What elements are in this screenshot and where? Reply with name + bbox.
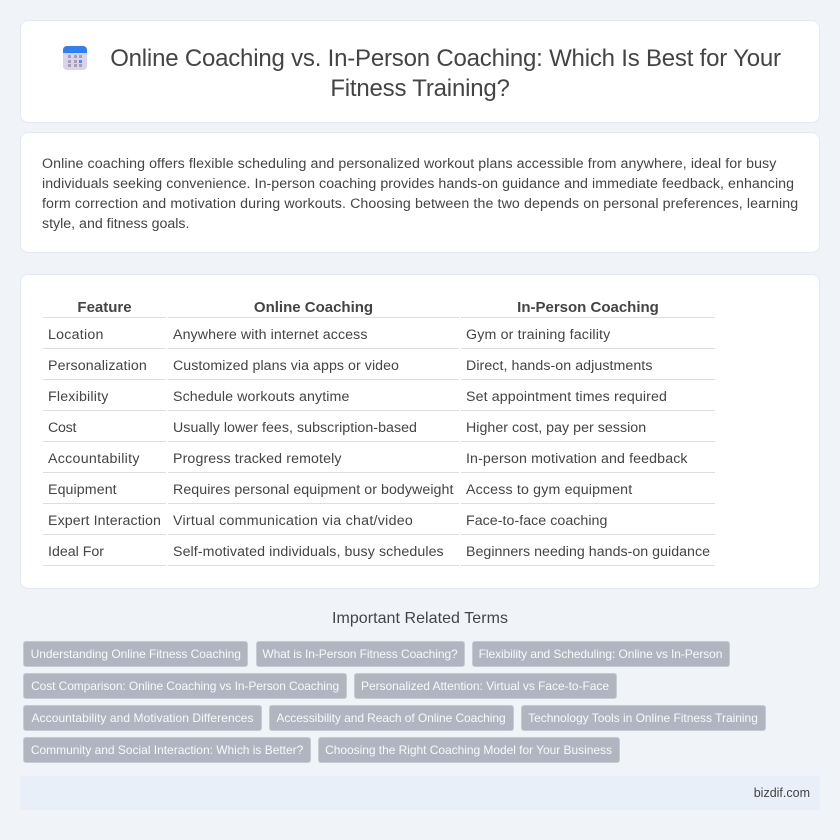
comparison table: Beginners needing hands-on guidance — [466, 544, 710, 560]
comparison table: In-person motivation and feedback — [466, 451, 688, 467]
comparison table: Online Coaching — [254, 299, 373, 316]
comparison table: Location — [48, 327, 104, 343]
title — [110, 45, 781, 102]
comparison table: Personalization — [48, 358, 147, 374]
related term tags: What is In-Person Fitness Coaching? — [262, 647, 458, 661]
related term tags: Flexibility and Scheduling: Online vs In-Person — [479, 647, 722, 661]
comparison table: Virtual communication via chat/video — [173, 513, 413, 529]
comparison table: Direct, hands-on adjustments — [466, 358, 652, 374]
related term tags: Accessibility and Reach of Online Coaching — [276, 711, 506, 725]
icon: calendar — [63, 46, 87, 70]
related term tags: Accountability and Motivation Differences — [31, 711, 254, 725]
summary text: Online coaching offers flexible scheduling and personalized workout plans accessible from anywhere, ideal for busy — [42, 156, 776, 172]
comparison table: Requires personal equipment or bodyweight — [173, 482, 453, 498]
related term tags: Understanding Online Fitness Coaching — [31, 647, 241, 661]
panel: comparison table — [20, 274, 820, 589]
summary text — [42, 156, 798, 232]
panel: title card — [20, 20, 820, 123]
comparison table: Face-to-face coaching — [466, 513, 607, 529]
comparison table: Self-motivated individuals, busy schedules — [173, 544, 444, 560]
comparison table: Customized plans via apps or video — [173, 358, 399, 374]
comparison table: Progress tracked remotely — [173, 451, 342, 467]
comparison table: Usually lower fees, subscription-based — [173, 420, 417, 436]
comparison table — [43, 299, 715, 566]
related term tags: Personalized Attention: Virtual vs Face-to-Face — [361, 679, 609, 693]
comparison table: In-Person Coaching — [517, 299, 659, 316]
comparison table: Cost — [48, 420, 76, 436]
comparison table: Equipment — [48, 482, 117, 498]
related term tags: Choosing the Right Coaching Model for Your Business — [325, 743, 612, 757]
comparison table: Feature — [77, 299, 132, 316]
related term tags: Technology Tools in Online Fitness Training — [528, 711, 758, 725]
comparison table: Expert Interaction — [48, 513, 161, 529]
title: Online Coaching vs. In-Person Coaching: Which Is Best for Your — [110, 45, 781, 72]
comparison table: Access to gym equipment — [466, 482, 632, 498]
related term tags — [23, 641, 766, 763]
comparison table: Accountability — [48, 451, 140, 467]
summary text: style, and fitness goals. — [42, 216, 189, 232]
related term tags: Community and Social Interaction: Which is Better? — [31, 743, 303, 757]
footer: bizdif.com — [754, 786, 810, 800]
summary text: individuals seeking convenience. In-person coaching provides hands-on guidance and immediate feedback, enhancing — [42, 176, 794, 192]
panel: summary — [20, 132, 820, 253]
comparison table: Anywhere with internet access — [173, 327, 368, 343]
related terms heading: Important Related Terms — [332, 610, 508, 627]
comparison table: Flexibility — [48, 389, 109, 405]
comparison table: Higher cost, pay per session — [466, 420, 646, 436]
footer — [20, 776, 820, 810]
comparison table: Schedule workouts anytime — [173, 389, 350, 405]
comparison table: Set appointment times required — [466, 389, 667, 405]
title: Fitness Training? — [330, 75, 510, 102]
summary text: form correction and motivation during workouts. Choosing between the two depends on personal preferences, learning — [42, 196, 798, 212]
comparison table: Gym or training facility — [466, 327, 610, 343]
comparison table: Ideal For — [48, 544, 104, 560]
related term tags: Cost Comparison: Online Coaching vs In-Person Coaching — [31, 679, 339, 693]
